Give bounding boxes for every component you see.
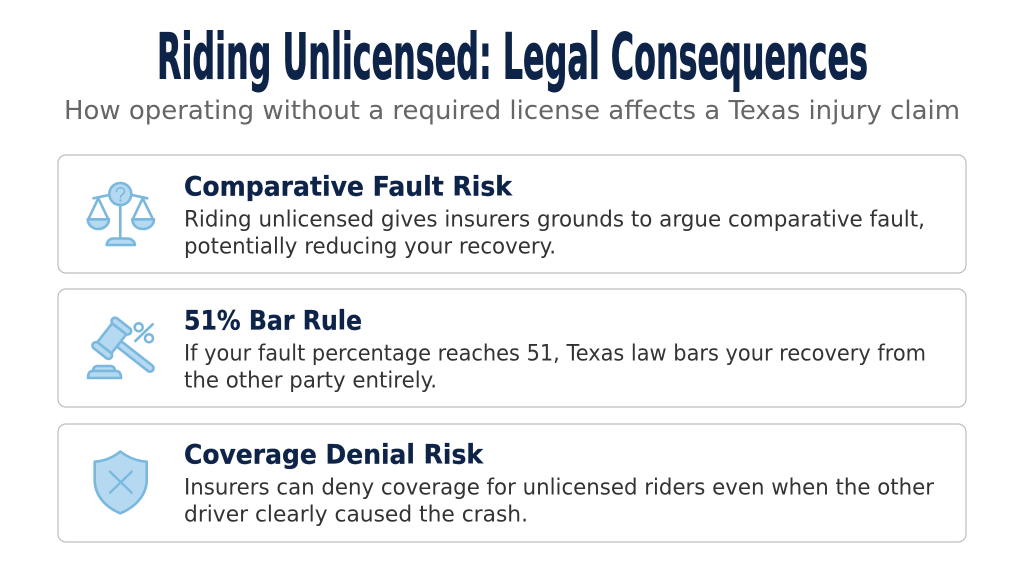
body text: potentially reducing your recovery.	[184, 234, 556, 260]
card background	[58, 289, 966, 407]
card background	[58, 424, 966, 542]
icon: gavel with percent sign	[88, 316, 164, 385]
body text: driver clearly caused the crash.	[184, 502, 528, 528]
panel: comparative fault risk	[58, 155, 966, 273]
card background	[58, 155, 966, 273]
body text: If your fault percentage reaches 51, Texas law bars your recovery from	[184, 342, 926, 366]
subtitle: How operating without a required license affects a Texas injury claim	[64, 96, 960, 126]
body text: the other party entirely.	[184, 368, 437, 394]
body text: Insurers can deny coverage for unlicensed riders even when the other	[184, 476, 935, 500]
panel: coverage denial risk	[58, 424, 966, 542]
icon: balance scale with question mark	[88, 183, 154, 245]
heading: Coverage Denial Risk	[184, 440, 484, 470]
heading: 51% Bar Rule	[184, 306, 362, 336]
icon: shield with x	[95, 452, 147, 513]
heading: Comparative Fault Risk	[184, 172, 513, 202]
body text: Riding unlicensed gives insurers grounds to argue comparative fault,	[184, 208, 925, 232]
panel: 51% bar rule	[58, 289, 966, 407]
